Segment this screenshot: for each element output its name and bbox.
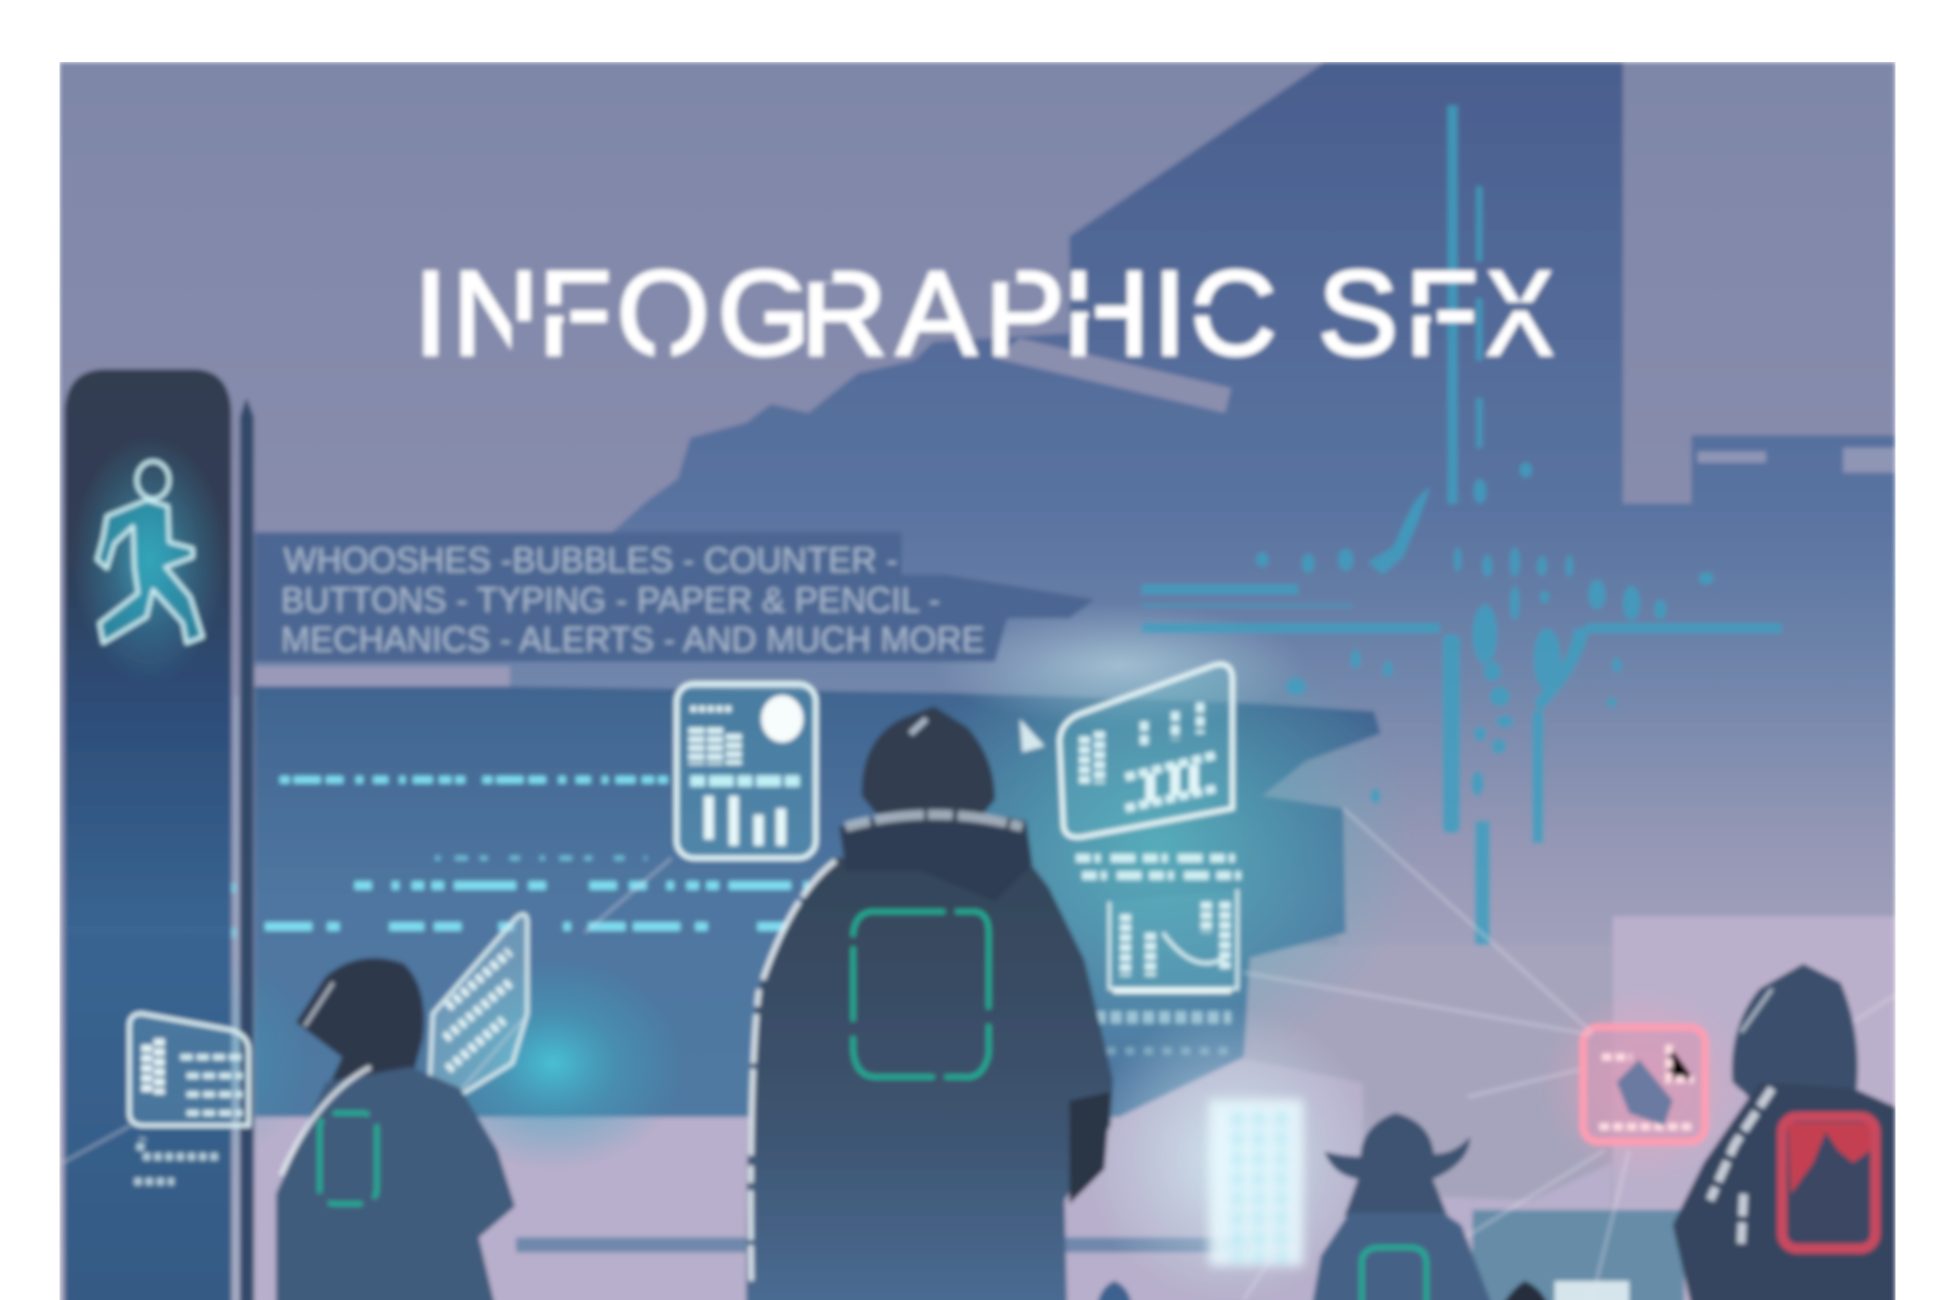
red interior	[1788, 1123, 1870, 1194]
small dark head silhouette	[1502, 1281, 1548, 1300]
hair highlight	[305, 982, 333, 1026]
central dark band	[255, 686, 1380, 1117]
floor stripe	[516, 1237, 1250, 1252]
rim highlight	[281, 1067, 371, 1175]
pale rooftop strips	[1698, 448, 1895, 473]
collar	[839, 813, 1032, 902]
body	[1312, 1213, 1492, 1300]
distant building silhouette	[255, 62, 1895, 995]
title: INFOGRAPHIC SF	[414, 247, 1478, 380]
HUD panel: left small	[129, 1014, 249, 1181]
small head silhouette centre	[1097, 1281, 1132, 1300]
HUD panel: slanted upper right	[1060, 664, 1232, 837]
hat and hair	[1324, 1113, 1470, 1216]
backpack outline red	[1782, 1117, 1875, 1249]
coat	[746, 858, 1113, 1300]
white glow upper right	[964, 613, 1276, 718]
lilac wall block	[1613, 917, 1895, 1300]
backpack outline green	[853, 912, 989, 1077]
person: hat figure	[1312, 1113, 1492, 1300]
white glow floor	[1108, 1018, 1354, 1278]
small white triangle	[1020, 719, 1045, 752]
hood	[1732, 964, 1858, 1113]
pale building ledge	[995, 338, 1231, 413]
icon: glowing walking pedestrian	[78, 448, 220, 668]
HUD panel: slanted left	[429, 914, 527, 1108]
hair	[296, 958, 424, 1084]
HUD panel: top centre	[677, 684, 816, 858]
lilac plaza floor	[255, 1056, 1612, 1300]
network lines	[62, 808, 1895, 1300]
subtitle list: WHOOSHES -BUBBLES - COUNTER -	[284, 541, 898, 580]
HUD panel: pink alert	[1538, 987, 1750, 1181]
pale awning strip	[255, 667, 510, 686]
traffic signal pole	[65, 369, 231, 1300]
teal ground block	[1472, 1210, 1684, 1300]
title: X	[1486, 247, 1553, 380]
coat	[276, 1067, 515, 1300]
HUD panel: pale cyan tall	[1209, 1099, 1303, 1266]
collar snow highlight	[846, 815, 1022, 827]
shoulders	[1673, 1082, 1895, 1300]
strap highlights	[1710, 1088, 1772, 1244]
backpack outline green	[320, 1113, 377, 1204]
lower grey block	[1247, 946, 1612, 1124]
thin signal post	[240, 398, 254, 1300]
person: right figure	[1673, 964, 1895, 1300]
person: centre figure	[746, 706, 1113, 1300]
circuit crosshair graphic	[1142, 106, 1782, 945]
cyan glow left panel	[229, 985, 271, 1131]
beanie highlight	[910, 719, 926, 734]
subtitle list: BUTTONS - TYPING - PAPER & PENCIL -	[281, 581, 940, 620]
teal glow behind panels	[971, 688, 1381, 1036]
title	[420, 264, 1556, 362]
subtitle list	[281, 541, 985, 660]
white dot	[761, 695, 803, 742]
backpack outline green	[1362, 1247, 1426, 1300]
hood highlight	[1741, 989, 1772, 1032]
subtitle list: MECHANICS - ALERTS - AND MUCH MORE	[281, 621, 985, 660]
beanie	[862, 706, 995, 815]
floating data rows	[234, 780, 808, 945]
pole highlight line	[235, 696, 237, 1300]
cyan glow left figure	[462, 978, 658, 1161]
HUD panel: lower small	[1555, 1281, 1629, 1300]
text banner background	[255, 532, 1094, 662]
person: left figure	[276, 958, 515, 1300]
HUD panel: lower right stack	[1076, 858, 1244, 1051]
rim highlight	[751, 861, 836, 1281]
arm shadow	[1070, 1092, 1111, 1204]
